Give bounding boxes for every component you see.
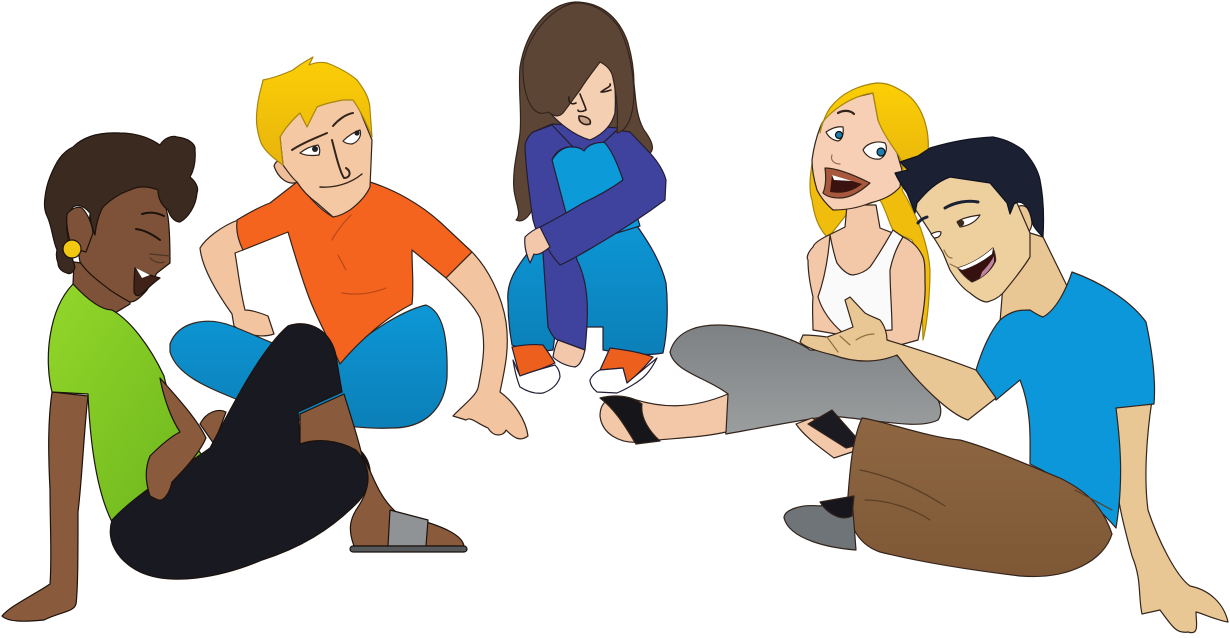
figure: man with black hair and blue t-shirt xyxy=(784,137,1228,633)
front hair xyxy=(820,83,928,178)
orange shirt xyxy=(237,182,472,364)
yellow hair xyxy=(256,57,372,165)
grey trousers xyxy=(670,325,941,434)
curly hair xyxy=(44,133,198,274)
hair back xyxy=(514,2,652,221)
purple sweater body and hanging arm xyxy=(525,125,587,350)
head xyxy=(812,93,902,210)
head xyxy=(76,180,170,302)
left arm far side xyxy=(1116,370,1228,633)
front shin and foot xyxy=(600,394,728,442)
neck xyxy=(1000,233,1068,325)
other foot xyxy=(796,418,858,458)
ear xyxy=(274,160,298,183)
teeth xyxy=(136,268,150,278)
right eye xyxy=(343,130,361,144)
hand folds xyxy=(827,334,874,352)
blue knees xyxy=(552,142,640,250)
blue lower legs xyxy=(508,220,667,354)
lower hand xyxy=(553,340,585,367)
blue jeans xyxy=(170,305,447,428)
sandal strap xyxy=(388,510,428,546)
long blonde hair back xyxy=(810,83,930,340)
teeth xyxy=(832,175,852,181)
nose xyxy=(831,155,840,164)
shin and foot xyxy=(300,394,464,546)
resting hand and arm xyxy=(146,378,206,500)
left shoe xyxy=(512,345,555,377)
yellow earring xyxy=(63,240,81,258)
figure: woman with dark curly hair and green shirt xyxy=(2,133,467,621)
tongue xyxy=(980,256,994,278)
face details xyxy=(569,84,611,125)
left arm xyxy=(200,220,274,336)
ear xyxy=(67,207,93,252)
left eye xyxy=(931,232,941,238)
black sandal strap xyxy=(600,396,660,444)
black hair xyxy=(895,137,1044,237)
blue t-shirt xyxy=(976,272,1155,528)
sandal sole xyxy=(350,546,467,552)
white top xyxy=(818,230,903,333)
nose xyxy=(944,250,958,268)
eyebrow xyxy=(838,111,854,114)
supporting arm and hand xyxy=(2,392,88,621)
head xyxy=(280,94,372,217)
sneaker xyxy=(784,498,856,550)
eyes xyxy=(826,127,843,141)
sneaker top xyxy=(820,496,854,518)
figure: man with yellow hair and orange shirt xyxy=(170,57,528,439)
purple sleeve across knees xyxy=(540,130,666,265)
black leggings xyxy=(110,324,370,579)
hair front xyxy=(523,3,634,133)
right pupil xyxy=(958,220,964,226)
left shoe sole xyxy=(513,360,560,393)
brown trousers xyxy=(848,418,1112,577)
open mouth lips xyxy=(823,168,870,198)
reaching arm and hand xyxy=(800,297,996,420)
eyebrows xyxy=(918,201,978,223)
face details xyxy=(292,113,362,187)
ear xyxy=(1013,206,1032,235)
neck and arms skin xyxy=(807,205,925,345)
right shoe sole xyxy=(590,358,657,393)
right eye xyxy=(957,215,980,227)
right arm and hand xyxy=(446,252,528,439)
neck xyxy=(73,262,130,322)
figure: girl with long brown hair and purple sweater xyxy=(508,2,667,393)
foot behind xyxy=(200,410,226,444)
head xyxy=(912,168,1030,302)
open mouth xyxy=(958,248,996,282)
face details xyxy=(136,213,164,240)
mouth interior xyxy=(830,175,862,193)
head xyxy=(550,62,615,140)
hand on knee xyxy=(525,227,550,263)
green shirt xyxy=(48,284,204,522)
left eye xyxy=(300,145,320,156)
nose xyxy=(150,254,170,263)
pupils xyxy=(312,146,318,152)
other sandal xyxy=(808,410,862,448)
right shoe xyxy=(600,348,653,383)
laughing mouth xyxy=(134,268,160,296)
shirt folds xyxy=(332,215,386,294)
trouser folds xyxy=(860,470,1112,520)
sweater yoke behind the chin xyxy=(533,124,650,190)
figure: blonde woman with white top and grey trousers xyxy=(600,83,941,458)
upper teeth xyxy=(958,248,993,270)
